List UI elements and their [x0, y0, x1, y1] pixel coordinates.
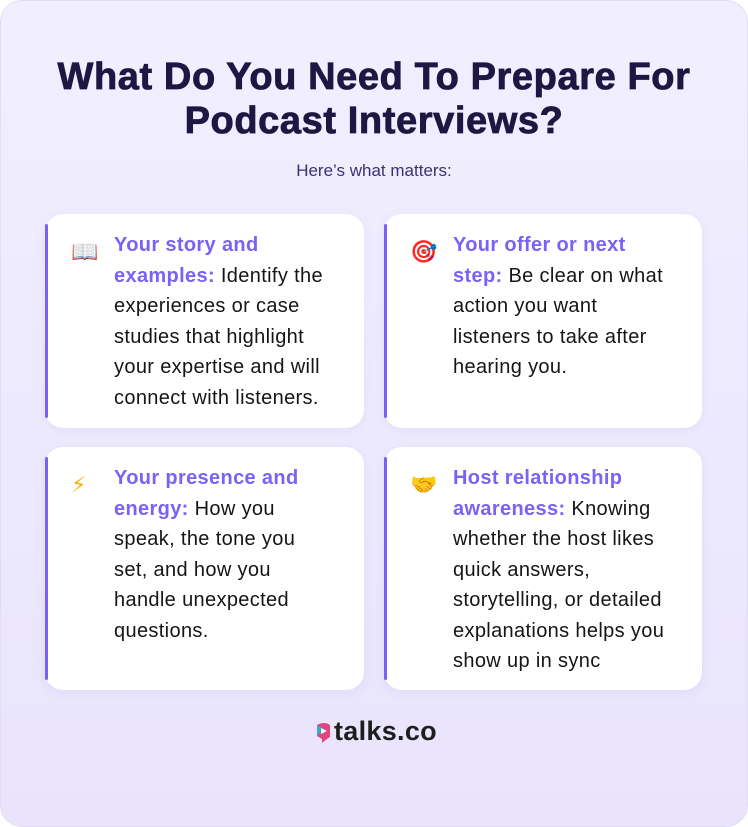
- text: offer: listeners to take after: [453, 326, 647, 348]
- icon: handshake: 🤝: [410, 473, 437, 498]
- text: story: connect with listeners.: [114, 386, 319, 408]
- text: presence: Your presence and: [114, 467, 299, 489]
- text: host: [453, 467, 664, 672]
- text: presence: questions.: [114, 620, 209, 642]
- panel: host: [384, 447, 702, 690]
- text: host: show up in sync: [453, 650, 601, 672]
- text: story: your expertise and will: [114, 356, 320, 378]
- text: presence: set, and how you: [114, 558, 271, 580]
- text: offer: [453, 234, 663, 378]
- title: What Do You Need To Prepare For: [57, 56, 690, 98]
- title: Podcast Interviews?: [185, 100, 563, 142]
- text: host: Host relationship: [453, 467, 622, 489]
- text: host: awareness: Knowing: [453, 498, 651, 520]
- text: story: experiences or case: [114, 295, 300, 317]
- text: presence: speak, the tone you: [114, 528, 295, 550]
- text: presence: handle unexpected: [114, 589, 289, 611]
- text: presence: energy: How you: [114, 498, 275, 520]
- text: host: storytelling, or detailed: [453, 589, 662, 611]
- text: story: examples: Identify the: [114, 264, 323, 286]
- logo: talks.co: [334, 716, 437, 746]
- text: host: whether the host likes: [453, 528, 654, 550]
- title: [57, 56, 690, 142]
- text: presence: [114, 467, 299, 642]
- panel: presence: [45, 447, 364, 690]
- text: offer: hearing you.: [453, 356, 567, 378]
- text: story: studies that highlight: [114, 326, 304, 348]
- text: offer: Your offer or next: [453, 234, 626, 256]
- panel: offer: [384, 214, 702, 428]
- panel: story: [45, 214, 364, 428]
- text: offer: step: Be clear on what: [453, 264, 663, 286]
- icon: target: 🎯: [410, 240, 437, 265]
- text: host: quick answers,: [453, 558, 590, 580]
- text: offer: action you want: [453, 295, 597, 317]
- text: host: explanations helps you: [453, 620, 664, 642]
- text: story: Your story and: [114, 234, 259, 256]
- icon: book: 📖: [71, 240, 98, 265]
- subtitle: Here’s what matters:: [296, 161, 452, 180]
- icon: lightning: ⚡: [71, 473, 86, 498]
- text: story: [114, 234, 323, 408]
